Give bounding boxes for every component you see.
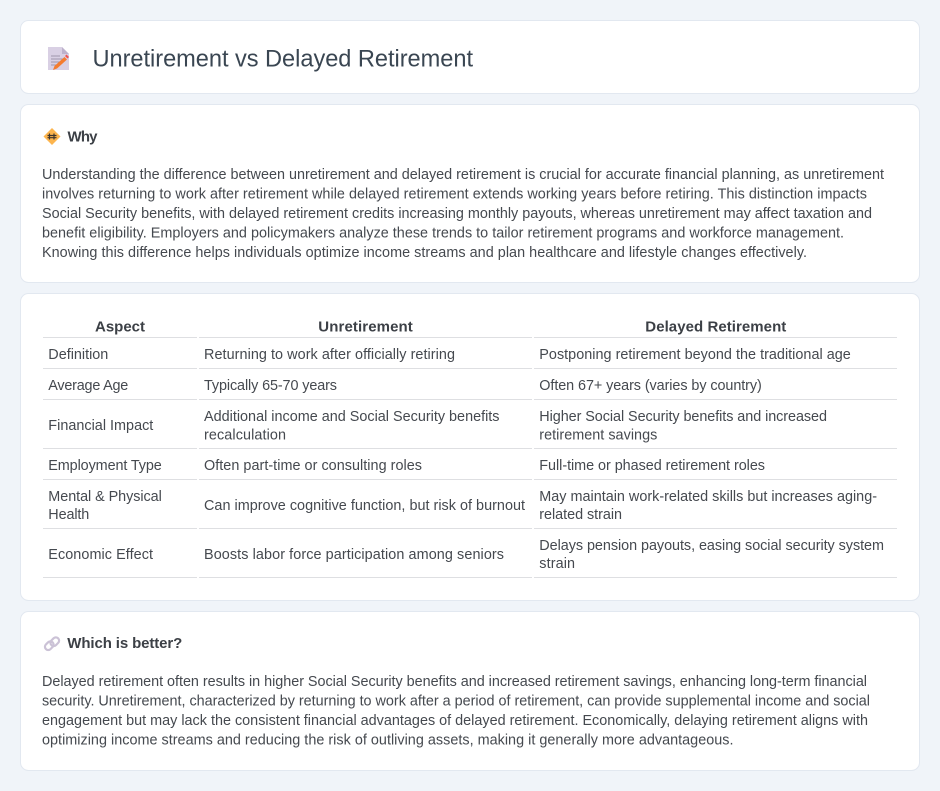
title: Unretirement vs Delayed Retirement — [92, 47, 473, 73]
row: financial impact: recalculation — [204, 428, 286, 444]
row: definition: Definition — [48, 347, 108, 363]
heading: why: Why — [68, 129, 98, 146]
text block: why explanation: benefit eligibility. Employers and policymakers analyze these trends to tailor retirement programs and workforce management. — [42, 226, 844, 242]
text block: which is better explanation: optimizing income streams and reducing the risk of outliving assets, making it generally more advantageous. — [42, 732, 734, 748]
row: economic effect: Economic Effect — [48, 547, 153, 563]
row: employment type: Full-time or phased retirement roles — [539, 458, 765, 474]
icon: chain link — [44, 636, 60, 651]
table rules — [43, 337, 897, 578]
text block: why explanation: Knowing this difference helps individuals optimize income streams and plan healthcare and lifestyle changes effectively. — [42, 245, 807, 261]
row: financial impact: retirement savings — [539, 428, 657, 444]
row: economic effect — [48, 538, 884, 572]
row: financial impact — [48, 409, 827, 444]
icon: document with pencil — [48, 47, 69, 70]
row: average age: Often 67+ years (varies by country) — [539, 378, 762, 394]
row: employment type: Often part-time or consulting roles — [204, 458, 422, 474]
row: mental and physical health: Can improve cognitive function, but risk of burnout — [204, 498, 525, 514]
text block: which is better explanation: security. Unretirement, characterized by returning to work after a period of retirement, can provide supplemental income and social — [42, 694, 870, 710]
panel: which is better — [20, 612, 920, 770]
row: mental and physical health: related strain — [539, 507, 622, 523]
row: definition: Postponing retirement beyond the traditional age — [539, 347, 851, 363]
row: economic effect: Delays pension payouts, easing social security system — [539, 538, 884, 554]
row: mental and physical health — [48, 489, 877, 523]
text block: why explanation: Social Security benefits, with delayed retirement credits increasing monthly payouts, whereas unretirement may affect taxation and — [42, 206, 872, 222]
heading: which is better: Which is better? — [67, 635, 182, 652]
table header row — [95, 319, 786, 336]
row: definition: Returning to work after officially retiring — [204, 347, 455, 363]
text block: why explanation: Understanding the difference between unretirement and delayed retirement is crucial for accurate financial planning, as unretirement — [42, 167, 884, 183]
panel: title header — [20, 20, 920, 94]
row: mental and physical health: Mental & Physical — [48, 489, 162, 505]
table header row: Aspect — [95, 319, 145, 336]
panel: why — [20, 104, 920, 282]
table header row: Delayed Retirement — [645, 319, 786, 336]
text block: which is better explanation: engagement but may lack the consistent financial advantages of delayed retirement. Economically, delaying retirement aligns with — [42, 713, 868, 729]
row: employment type: Employment Type — [48, 458, 162, 474]
row: definition — [48, 347, 851, 363]
text block: why explanation: involves returning to work after retirement while delayed retirement extends working years before retiring. This distinction impacts — [42, 186, 867, 202]
row: economic effect: Boosts labor force participation among seniors — [204, 547, 504, 563]
row: employment type — [48, 458, 765, 474]
row: financial impact: Financial Impact — [48, 418, 153, 434]
table header row: Unretirement — [318, 319, 413, 336]
text block: which is better explanation — [42, 674, 870, 748]
row: financial impact: Additional income and Social Security benefits — [204, 409, 500, 425]
text block: why explanation — [42, 167, 884, 261]
row: average age: Average Age — [48, 378, 128, 394]
row: average age: Typically 65-70 years — [204, 378, 337, 394]
row: economic effect: strain — [539, 556, 575, 572]
row: financial impact: Higher Social Security benefits and increased — [539, 409, 827, 425]
text block: which is better explanation: Delayed retirement often results in higher Social Security benefits and increased retirement savings, enhancing long-term financial — [42, 674, 867, 690]
row: average age — [48, 378, 762, 394]
icon: warning diamond — [44, 128, 60, 145]
panel: comparison table — [20, 294, 920, 600]
row: mental and physical health: Health — [48, 507, 89, 523]
row: mental and physical health: May maintain work-related skills but increases aging- — [539, 489, 877, 505]
